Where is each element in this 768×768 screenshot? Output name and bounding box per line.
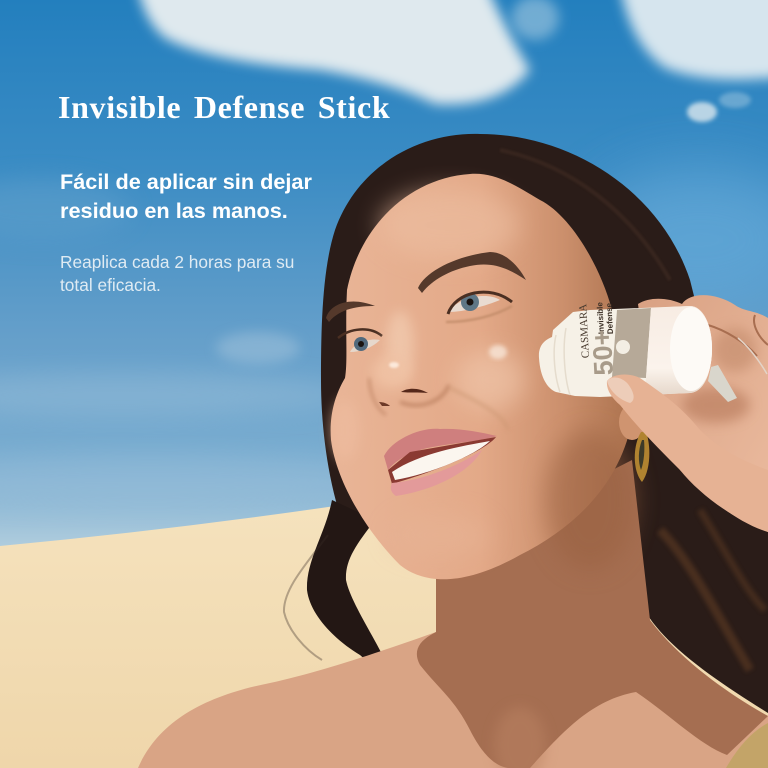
- sky background: [0, 0, 768, 560]
- body text: total eficacia.: [60, 275, 161, 295]
- left hair strand: [284, 500, 386, 705]
- sand dune: [0, 506, 768, 768]
- neck mid light: [494, 707, 546, 768]
- hair highlights: [500, 150, 765, 670]
- hair back: [321, 134, 768, 713]
- body text: Reaplica cada 2 horas para su: [60, 252, 294, 272]
- left eyebrow: [326, 302, 375, 322]
- face shading and highlights: [331, 190, 635, 570]
- left eye: [338, 329, 382, 352]
- hand behind the stick: [638, 295, 768, 532]
- right eye: [446, 292, 512, 322]
- shoulders and chest: [138, 632, 768, 768]
- title: Invisible Defense Stick: [58, 89, 390, 125]
- sunscreen stick product: 50+: [587, 329, 619, 376]
- thumb and nail: [607, 374, 768, 532]
- sunscreen stick product: Defense: [604, 302, 615, 334]
- face: [331, 174, 630, 579]
- lips and smile: [384, 429, 497, 496]
- stick cap: [645, 306, 712, 395]
- product label text: CASMARA: [577, 303, 592, 358]
- product label band: [612, 308, 651, 378]
- right eyebrow: [418, 252, 526, 293]
- ear lobe: [619, 404, 645, 440]
- subheading: [60, 169, 312, 223]
- subheading: residuo en las manos.: [60, 198, 288, 223]
- swimsuit strap: [726, 723, 768, 768]
- neck shadow: [417, 460, 768, 768]
- sunscreen stick product: [539, 301, 712, 397]
- nose: [369, 311, 508, 430]
- sunscreen stick product: Invisible: [595, 301, 606, 334]
- clouds: [135, 0, 768, 122]
- earring: [635, 432, 649, 482]
- body text: [60, 252, 294, 295]
- subheading: Fácil de aplicar sin dejar: [60, 169, 312, 194]
